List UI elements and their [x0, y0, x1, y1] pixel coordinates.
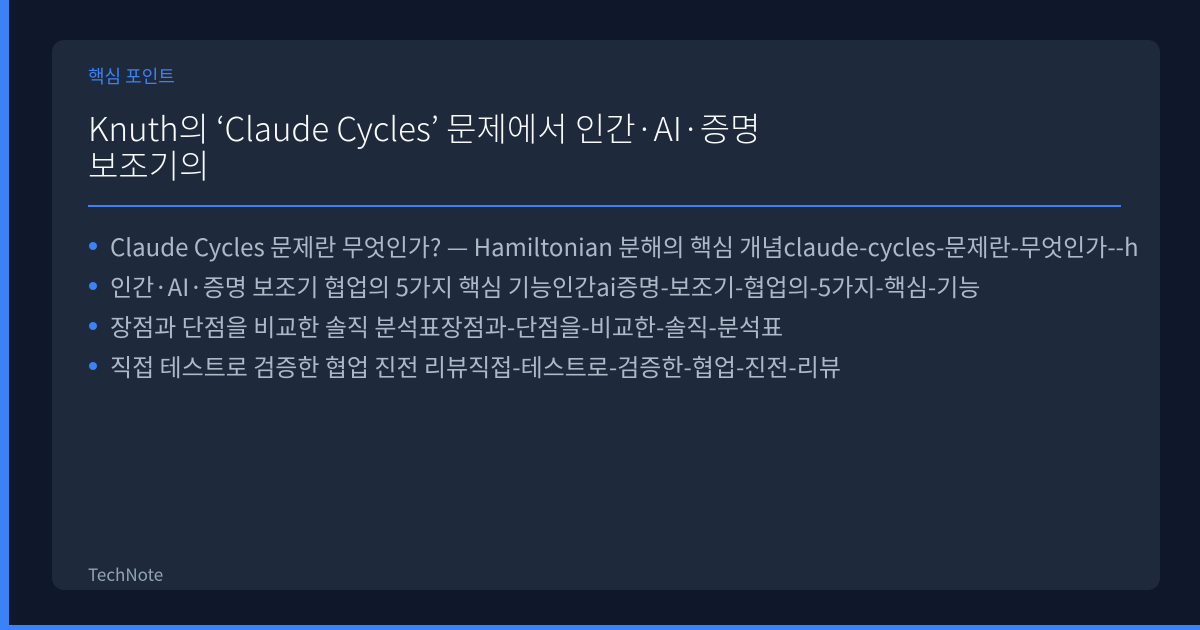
title: Knuth의 ‘Claude Cycles’ 문제에서 인간·AI·증명 — [88, 103, 760, 151]
title: 보조기의 — [88, 140, 209, 188]
footer brand: TechNote — [88, 561, 163, 586]
title — [88, 103, 760, 188]
kicker: 핵심 포인트 — [88, 63, 175, 89]
bullet list — [89, 231, 1139, 383]
